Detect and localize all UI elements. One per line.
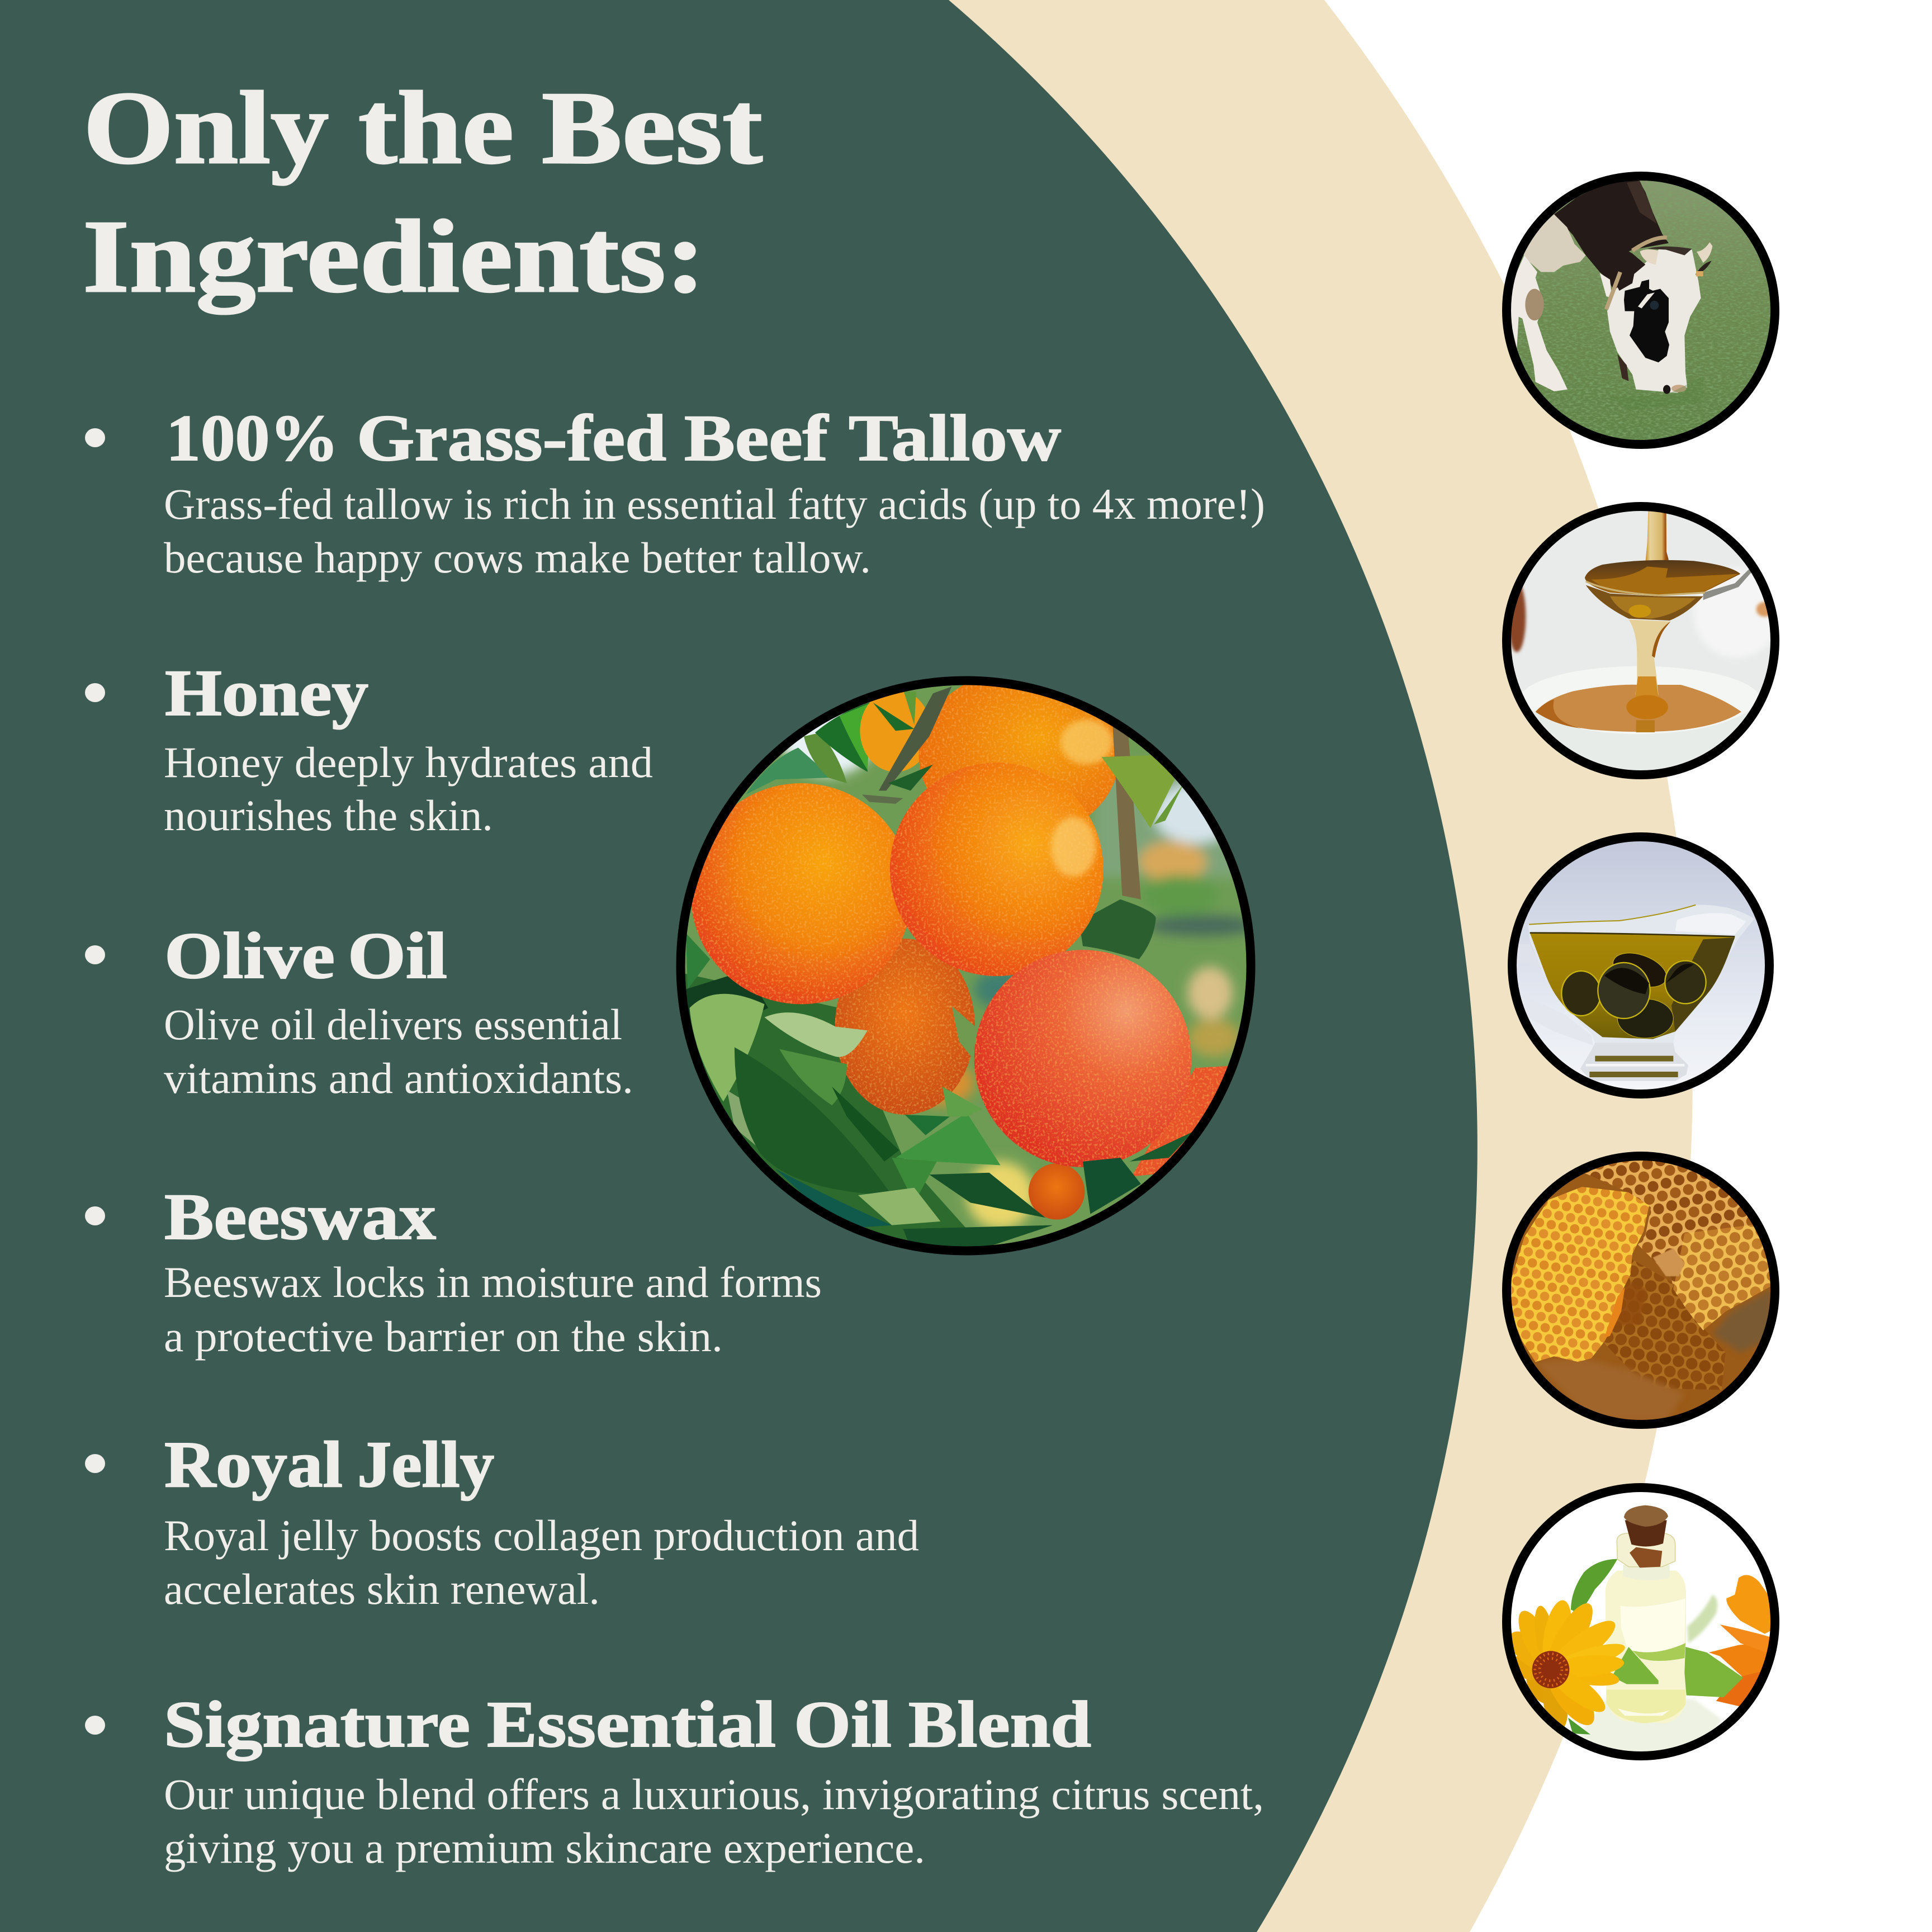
ingredient: beeswax xyxy=(85,1180,822,1361)
description: olive oil xyxy=(164,1000,633,1102)
centre orange xyxy=(890,763,1104,976)
ingredient: olive oil xyxy=(85,919,633,1102)
ingredient: royal jelly xyxy=(85,1428,919,1613)
foreground leaves xyxy=(690,994,765,1101)
heading: beef tallow: Beef xyxy=(684,401,829,475)
ingredient: beef tallow xyxy=(85,401,1265,582)
front comb xyxy=(1509,1187,1649,1362)
heading: royal jelly xyxy=(164,1428,494,1501)
cow body xyxy=(1554,179,1669,291)
right flower xyxy=(1709,1641,1772,1707)
ring xyxy=(1507,176,1775,444)
oil xyxy=(1530,933,1735,1039)
spoon xyxy=(1703,569,1751,600)
honey pool xyxy=(1536,685,1741,732)
description: beeswax: a protective barrier on the skin. xyxy=(164,1312,723,1361)
description: beef tallow: because happy cows make better tallow. xyxy=(164,533,871,582)
description: essential oil blend: giving you a premium skincare experience. xyxy=(164,1824,925,1872)
title: Only xyxy=(83,70,329,186)
heading: essential oil blend: Oil xyxy=(794,1688,892,1761)
heading: essential oil blend: Essential xyxy=(487,1688,776,1761)
description: beeswax: Beeswax locks in moisture and forms xyxy=(164,1258,822,1306)
heading: royal jelly: Jelly xyxy=(357,1428,494,1501)
ring xyxy=(1507,1156,1775,1424)
bottle xyxy=(1606,1570,1686,1723)
ingredient: honey xyxy=(85,656,653,840)
olives xyxy=(1561,946,1706,1038)
title xyxy=(83,70,763,314)
ring xyxy=(1507,1488,1775,1756)
bullet xyxy=(85,1206,105,1225)
heading: honey: Honey xyxy=(165,656,368,730)
description: essential oil blend xyxy=(164,1770,1264,1872)
heading: beeswax: Beeswax xyxy=(164,1180,436,1253)
description: olive oil: Olive oil delivers essential xyxy=(164,1000,622,1049)
heading: olive oil: Olive xyxy=(164,919,335,992)
description: honey: nourishes the skin. xyxy=(164,791,493,840)
title: Best xyxy=(542,70,763,186)
heading: essential oil blend: Blend xyxy=(908,1688,1091,1761)
ingredient: essential oil blend xyxy=(85,1688,1264,1872)
description: royal jelly xyxy=(164,1511,919,1613)
heading: beef tallow xyxy=(166,401,1061,475)
background leaves xyxy=(746,747,832,794)
oranges: top and rear xyxy=(919,685,1116,816)
description: honey: Honey deeply hydrates and xyxy=(164,738,653,787)
photo: grazing cow xyxy=(1498,168,1783,453)
heading: beef tallow: Tallow xyxy=(849,401,1061,475)
heading: royal jelly: Royal xyxy=(164,1428,343,1501)
heading: essential oil blend xyxy=(164,1688,1091,1761)
photo: oranges on branch xyxy=(671,671,1259,1258)
description: honey xyxy=(164,738,653,840)
background foliage mass xyxy=(685,974,965,1240)
cow head xyxy=(1600,273,1612,298)
bullet xyxy=(85,1716,105,1735)
dark green arc panel xyxy=(0,0,1478,1932)
lower orange xyxy=(691,763,1104,1115)
heading: olive oil: Oil xyxy=(348,919,447,992)
top leaf xyxy=(1571,1559,1617,1612)
yellow flower xyxy=(1503,1597,1627,1732)
description: royal jelly: Royal jelly boosts collagen production and xyxy=(164,1511,919,1560)
bullet xyxy=(85,945,105,964)
heading: beef tallow: 100% xyxy=(166,401,339,475)
description: beeswax xyxy=(164,1258,822,1361)
title: Ingredients: xyxy=(83,199,705,314)
glass xyxy=(1528,905,1754,1043)
description: olive oil: vitamins and antioxidants. xyxy=(164,1054,633,1102)
ring xyxy=(1507,506,1775,775)
heading: essential oil blend: Signature xyxy=(164,1688,470,1761)
bullet xyxy=(85,683,105,702)
bowl xyxy=(1519,666,1761,735)
photo: honey dripping from spoon xyxy=(1498,498,1783,783)
right leaf xyxy=(1684,1647,1743,1697)
title: the xyxy=(358,70,514,186)
left orange xyxy=(691,783,912,1004)
bullet xyxy=(85,428,105,447)
photo: honeycomb xyxy=(1498,1148,1783,1433)
ring xyxy=(681,681,1251,1251)
foot xyxy=(1580,1043,1688,1081)
description: royal jelly: accelerates skin renewal. xyxy=(164,1565,600,1613)
description: beef tallow xyxy=(164,480,1265,582)
description: essential oil blend: Our unique blend offers a luxurious, invigorating citrus scent, xyxy=(164,1770,1264,1819)
photo: olive oil in gravy boat xyxy=(1498,823,1783,1108)
bullet xyxy=(85,1454,105,1473)
ring xyxy=(1512,837,1769,1094)
drip xyxy=(1628,619,1670,695)
big right oranges xyxy=(1029,1163,1085,1220)
heading: beef tallow: Grass-fed xyxy=(357,401,666,475)
description: beef tallow: Grass-fed tallow is rich in essential fatty acids (up to 4x more!) xyxy=(164,480,1265,528)
rear comb xyxy=(1582,1159,1772,1330)
cork xyxy=(1630,1547,1662,1568)
handle xyxy=(1515,944,1541,967)
lower honey mass xyxy=(1604,1259,1726,1390)
stream xyxy=(1645,510,1669,563)
photo: essential oil bottle with flowers xyxy=(1498,1479,1783,1764)
heading: olive oil xyxy=(164,919,447,992)
